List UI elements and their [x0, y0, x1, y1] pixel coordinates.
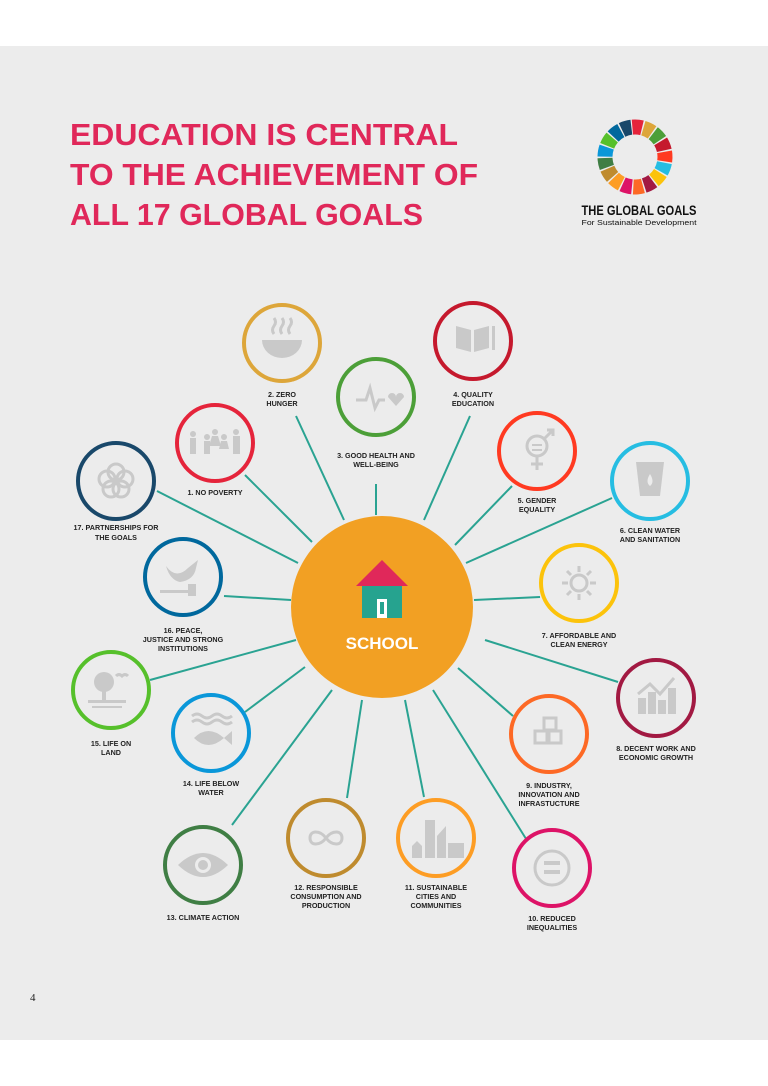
- goal 15: 15. LIFE ON: [91, 739, 131, 748]
- goal 15: [73, 652, 149, 757]
- logo: the global goals: THE GLOBAL GOALS: [582, 202, 696, 218]
- goal 6: [612, 443, 688, 544]
- goal 14: 14. LIFE BELOW: [183, 779, 239, 788]
- goal 6: AND SANITATION: [620, 535, 680, 544]
- center: school: SCHOOL: [346, 634, 418, 653]
- goal 17: [74, 443, 159, 542]
- goal 7: 7. AFFORDABLE AND: [542, 631, 616, 640]
- goal 12: [288, 800, 364, 910]
- goal 11: COMMUNITIES: [410, 901, 462, 910]
- logo: the global goals: For Sustainable Development: [582, 218, 698, 227]
- goal 3: [337, 359, 415, 469]
- goal 10: 10. REDUCED: [528, 914, 576, 923]
- goal 12: 12. RESPONSIBLE: [294, 883, 358, 892]
- goal 2: 2. ZERO: [268, 390, 296, 399]
- goal 9: 9. INDUSTRY,: [526, 781, 572, 790]
- goal 3: 3. GOOD HEALTH AND: [337, 451, 415, 460]
- goal 11: CITIES AND: [416, 892, 456, 901]
- center: school: [291, 516, 473, 698]
- goal 16: [143, 539, 224, 653]
- goal 17: THE GOALS: [95, 533, 137, 542]
- title: [70, 118, 478, 232]
- goal 14: [173, 695, 249, 797]
- goal 12: PRODUCTION: [302, 901, 350, 910]
- goal 4: EDUCATION: [452, 399, 494, 408]
- goal 5: EQUALITY: [519, 505, 555, 514]
- goal 8: ECONOMIC GROWTH: [619, 753, 693, 762]
- goal 6: 6. CLEAN WATER: [620, 526, 681, 535]
- logo: the global goals: [582, 124, 698, 227]
- goal 14: WATER: [198, 788, 225, 797]
- goal 16: JUSTICE AND STRONG: [143, 635, 224, 644]
- goal 5: 5. GENDER: [518, 496, 557, 505]
- goal 8: 8. DECENT WORK AND: [616, 744, 696, 753]
- goal 12: CONSUMPTION AND: [290, 892, 362, 901]
- goal 16: INSTITUTIONS: [158, 644, 208, 653]
- goal 8: [616, 660, 696, 762]
- goal 2: [244, 305, 320, 408]
- goal 2: HUNGER: [266, 399, 298, 408]
- goal 7: CLEAN ENERGY: [550, 640, 608, 649]
- goal 1: [177, 405, 253, 497]
- goal 16: 16. PEACE,: [164, 626, 202, 635]
- title: EDUCATION IS CENTRAL: [70, 118, 458, 152]
- goal 7: [541, 545, 617, 649]
- goal 9: INNOVATION AND: [518, 790, 580, 799]
- goal 15: LAND: [101, 748, 121, 757]
- goal 9: [511, 696, 587, 808]
- page number: 4: [30, 992, 36, 1004]
- goal 10: INEQUALITIES: [527, 923, 577, 932]
- goal 11: 11. SUSTAINABLE: [405, 883, 467, 892]
- goal 4: 4. QUALITY: [453, 390, 493, 399]
- goal 11: [398, 800, 474, 910]
- goal 13: 13. CLIMATE ACTION: [167, 913, 239, 922]
- goal 13: [165, 827, 241, 922]
- goal 5: [499, 413, 575, 514]
- connector lines: [150, 416, 618, 842]
- goal 17: 17. PARTNERSHIPS FOR: [74, 523, 159, 532]
- goal 1: 1. NO POVERTY: [187, 488, 243, 497]
- goal 9: INFRASTUCTURE: [518, 799, 580, 808]
- goal 10: [514, 830, 590, 932]
- title: TO THE ACHIEVEMENT OF: [70, 158, 478, 192]
- title: ALL 17 GLOBAL GOALS: [70, 198, 423, 232]
- goal 3: WELL-BEING: [353, 460, 399, 469]
- goal 4: [435, 303, 511, 408]
- icon: school house: [356, 560, 408, 618]
